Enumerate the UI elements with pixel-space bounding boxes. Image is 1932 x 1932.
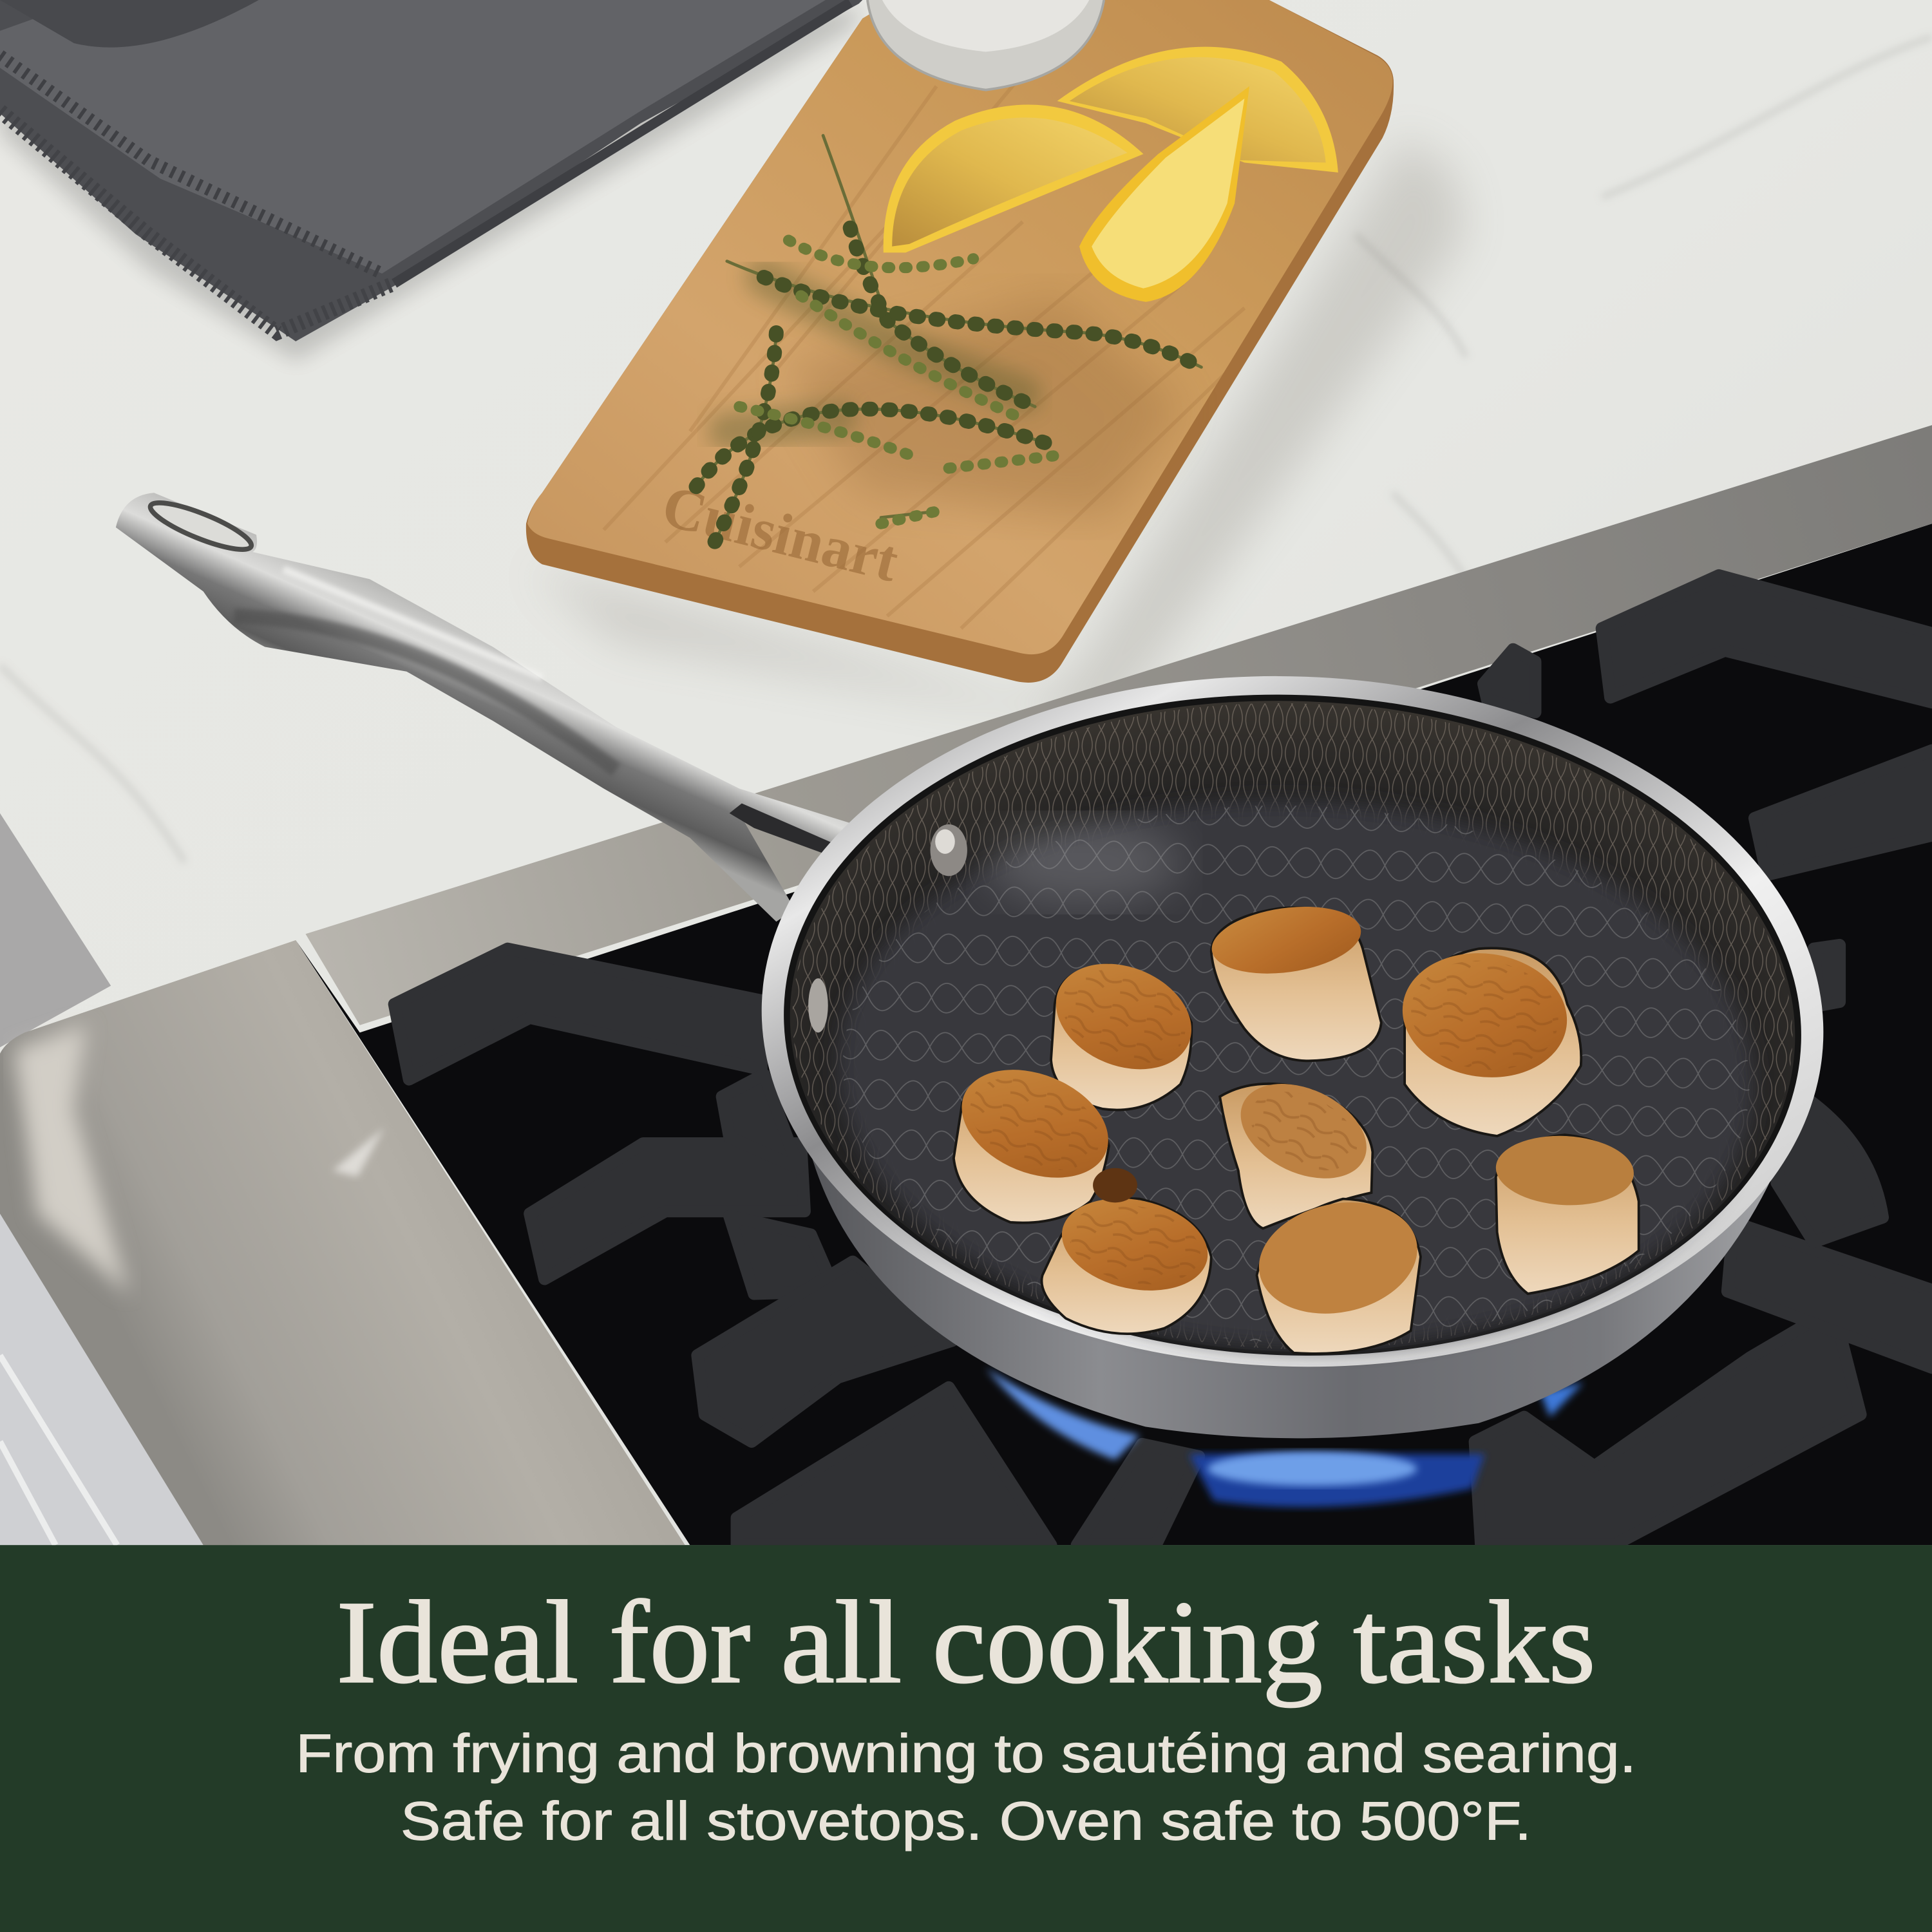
cutting board (526, 0, 1466, 727)
scallop 5 (1220, 1065, 1381, 1229)
lower cabinet (0, 1214, 204, 1545)
board logo: Cuisinart (656, 473, 905, 594)
herb and lemon shadow on board (788, 296, 1183, 518)
pan outer body (801, 1109, 1799, 1438)
thyme herbs (696, 135, 1201, 542)
scallop 1 (1208, 898, 1381, 1061)
headline: Ideal for all cooking tasks (336, 1577, 1596, 1708)
floor swirl pattern (834, 790, 1759, 1359)
towel (0, 0, 862, 361)
steel side block (0, 940, 685, 1545)
burner flames (986, 1368, 1584, 1507)
surface highlight (986, 819, 1183, 905)
pan rim inner line (772, 677, 1813, 1373)
left counter edge (0, 813, 111, 1047)
burner grates (394, 575, 1932, 1545)
scallop 2 (1040, 945, 1208, 1110)
floor surface (829, 785, 1764, 1364)
scallop 3 (1394, 943, 1581, 1136)
marble veins (0, 37, 1932, 862)
browned bit (1093, 1168, 1137, 1202)
board wood grain (603, 85, 1245, 630)
scallop 4 (945, 1050, 1124, 1223)
footer band (0, 1545, 1932, 1932)
rivets (808, 824, 967, 1032)
pan handle (116, 493, 850, 922)
scallop 6 (1041, 1186, 1217, 1334)
glass salt bowl (867, 0, 1104, 90)
stove back steel strip (305, 425, 1932, 1025)
pan rim (750, 658, 1835, 1385)
wall mesh pattern (781, 687, 1804, 1367)
frying pan (116, 493, 1835, 1438)
stove glass top (296, 524, 1932, 1545)
subtitle line 2: Safe for all stovetops. Oven safe to 500°F. (401, 1791, 1531, 1852)
scallops (945, 898, 1639, 1354)
subtitle line 1: From frying and browning to sautéing and searing. (296, 1723, 1636, 1783)
scallop 7 (1249, 1188, 1428, 1354)
pan wall (779, 684, 1806, 1369)
marble countertop (0, 0, 1932, 1545)
scallop 8 (1494, 1132, 1639, 1294)
lemon wedges (884, 47, 1338, 302)
